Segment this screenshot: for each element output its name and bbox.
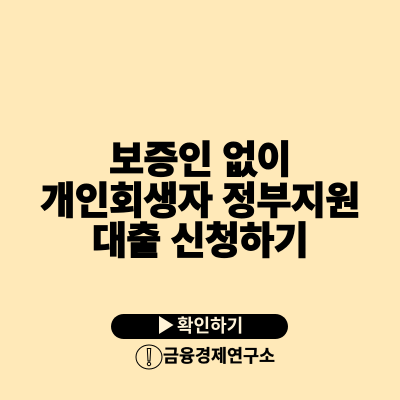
title [40,140,360,263]
button: 확인하기 [111,314,288,339]
button: 확인하기: 확인하기 [177,316,243,336]
title: 개인회생자 정부지원 [40,180,360,222]
brand name: 금융경제연구소 [163,346,275,366]
title: 대출 신청하기 [92,221,308,263]
icon: exclamation circle [136,344,162,370]
title: 보증인 없이 [109,140,291,182]
icon: play triangle [159,316,174,334]
